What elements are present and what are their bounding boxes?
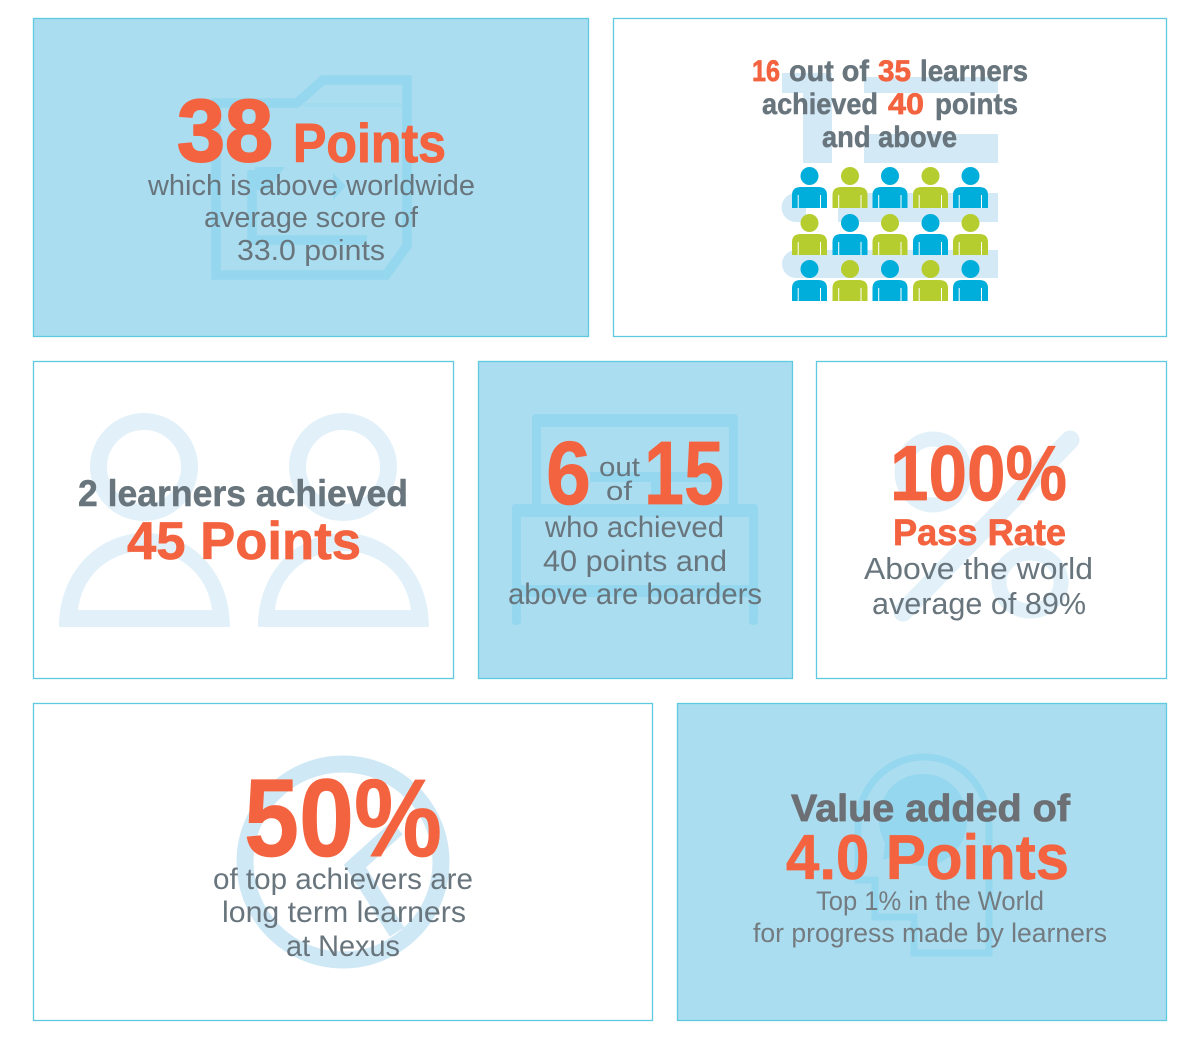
text: who achieved 40 points and above are boarders: above are boarders bbox=[508, 578, 762, 611]
heading: learners achieved 40 points bbox=[752, 55, 1028, 154]
text: of top achievers: long term learners bbox=[222, 896, 466, 929]
text: above worldwide average bbox=[147, 170, 475, 267]
heading: 38 Points bbox=[177, 81, 446, 180]
icon: head watermark bbox=[858, 757, 989, 953]
text: of top achievers: at Nexus bbox=[286, 930, 400, 963]
heading: learners achieved 40 points: out of bbox=[789, 55, 870, 88]
panel: 2 learners achieved 45 points bbox=[34, 362, 454, 678]
text: of top achievers: of top achievers are bbox=[213, 863, 473, 896]
text: above the world average: Above the world bbox=[864, 551, 1093, 586]
heading: 6 out of 15: 15 bbox=[644, 424, 724, 524]
panel: 38 points bbox=[34, 18, 588, 336]
heading: 6 out of 15: out bbox=[599, 452, 641, 482]
text: above the world average: average of 89% bbox=[872, 586, 1086, 621]
heading: 38 Points: Points bbox=[293, 112, 446, 174]
text: top 1% in the world: Top 1% in the World bbox=[816, 886, 1044, 916]
heading: 6 out of 15: of bbox=[606, 476, 633, 506]
heading: learners achieved 40 points: 40 bbox=[888, 88, 924, 121]
text: above worldwide average: which is above worldwide bbox=[147, 170, 475, 202]
heading: learners achieved 40 points: achieved bbox=[762, 88, 878, 121]
text: above worldwide average: average score of bbox=[204, 202, 419, 234]
icon: percent watermark bbox=[902, 439, 1070, 612]
icon: bed watermark bbox=[512, 414, 758, 625]
text: of top achievers bbox=[213, 863, 473, 963]
heading: 45 Points: 45 Points bbox=[127, 512, 361, 571]
icon: number watermark bbox=[782, 73, 998, 278]
heading: 6 out of 15 bbox=[546, 424, 724, 524]
text: who achieved 40 points and above are boarders bbox=[508, 511, 762, 611]
text: top 1% in the world bbox=[753, 886, 1107, 948]
heading: 100%: 100% bbox=[890, 429, 1067, 517]
heading: learners achieved 40 points: 35 bbox=[878, 55, 911, 88]
panel: value added bbox=[678, 704, 1166, 1020]
text: who achieved 40 points and above are boarders: who achieved bbox=[544, 511, 724, 544]
heading: Pass Rate: Pass Rate bbox=[893, 512, 1066, 553]
text: above the world average bbox=[864, 551, 1093, 621]
heading: learners achieved 40 points: points bbox=[935, 88, 1018, 121]
heading: learners achieved 40 points: 16 bbox=[752, 55, 780, 88]
heading: 6 out of 15: 6 bbox=[546, 424, 591, 524]
text: above worldwide average: 33.0 points bbox=[237, 235, 385, 267]
icon: clock watermark bbox=[245, 764, 441, 960]
pictogram: 15 people bbox=[792, 167, 988, 301]
panel: 16 out of 35 learners bbox=[614, 18, 1166, 336]
icon: book watermark bbox=[216, 80, 407, 275]
text: top 1% in the world: for progress made by learners bbox=[753, 918, 1107, 948]
panel: 6 out of 15 boarders bbox=[478, 362, 792, 678]
heading: 50%: 50% bbox=[244, 757, 442, 880]
heading: 4.0 Points: 4.0 Points bbox=[786, 823, 1069, 893]
heading: 2 learners achieved: 2 learners achieved bbox=[78, 473, 408, 514]
text: who achieved 40 points and above are boarders: 40 points and bbox=[543, 545, 727, 578]
icon: two people watermark bbox=[59, 422, 429, 627]
heading: 38 Points: 38 bbox=[177, 81, 273, 180]
heading: learners achieved 40 points: learners bbox=[920, 55, 1028, 88]
panel: 50% long term learners bbox=[34, 704, 652, 1020]
heading: learners achieved 40 points: and above bbox=[822, 121, 957, 154]
panel: 100% pass rate bbox=[816, 362, 1166, 678]
heading: Value added of: Value added of bbox=[791, 788, 1070, 830]
